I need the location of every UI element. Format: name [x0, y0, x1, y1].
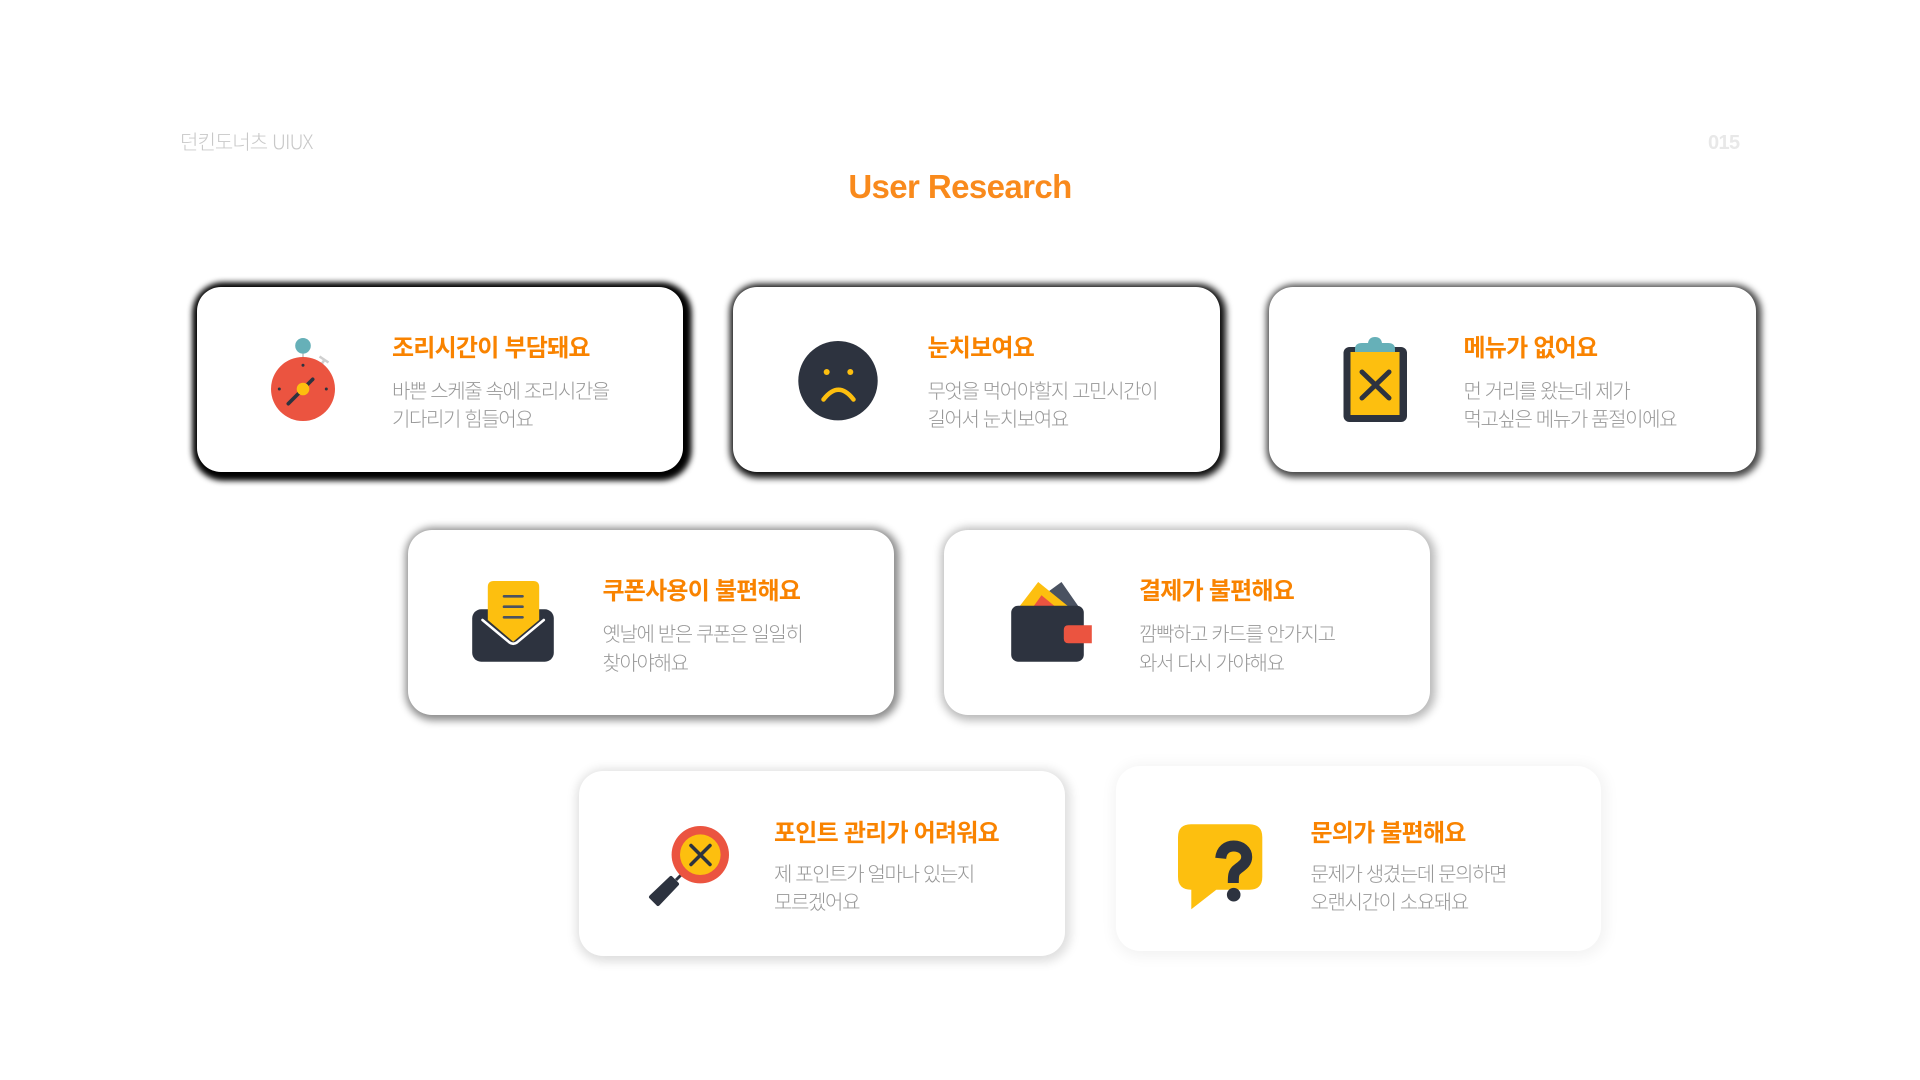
icon: envelope with coupon [472, 581, 554, 662]
page number: 015 [1708, 132, 1740, 154]
heading: 포인트 관리가 어려워요 [774, 812, 999, 848]
icon: clipboard [1344, 337, 1407, 422]
text: 제 포인트가 얼마나 있는지 [774, 858, 974, 887]
text [774, 858, 974, 915]
text: 문제가 생겼는데 문의하면 [1310, 858, 1506, 886]
text: 길어서 눈치보여요 [928, 403, 1068, 432]
text: 무엇을 먹어야할지 고민시간이 [928, 375, 1157, 404]
heading: 눈치보여요 [928, 328, 1034, 363]
icon: magnifier [648, 826, 729, 906]
heading: 결제가 불편해요 [1139, 571, 1294, 606]
icon: question bubble [1178, 824, 1262, 910]
heading: 조리시간이 부담돼요 [392, 328, 590, 363]
icon: sad face [798, 341, 878, 420]
panel: payment [944, 530, 1430, 715]
text: 바쁜 스케줄 속에 조리시간을 [392, 375, 609, 404]
text: 깜빡하고 카드를 안가지고 [1139, 618, 1335, 647]
text: 먹고싶은 메뉴가 품절이에요 [1464, 403, 1676, 432]
heading: 문의가 불편해요 [1310, 812, 1466, 848]
panel: feeling pressured [732, 287, 1220, 472]
text: 먼 거리를 왔는데 제가 [1464, 375, 1629, 404]
text: 오랜시간이 소요돼요 [1310, 886, 1468, 914]
text [1139, 618, 1335, 676]
text [1464, 375, 1676, 432]
heading: 메뉴가 없어요 [1464, 328, 1597, 363]
text [1310, 858, 1506, 914]
text: 기다리기 힘들어요 [392, 403, 532, 432]
text: 모르겠어요 [774, 886, 859, 915]
text [392, 375, 610, 432]
text [602, 618, 802, 676]
text [928, 375, 1157, 432]
icon: wallet [1011, 582, 1092, 662]
title: User Research [848, 168, 1072, 205]
panel: inquiry [1116, 766, 1600, 950]
panel: points [579, 771, 1065, 956]
heading: 쿠폰사용이 불편해요 [602, 571, 800, 606]
header label: 던킨도너츠 UIUX [180, 126, 312, 155]
text: 옛날에 받은 쿠폰은 일일히 [602, 618, 802, 647]
panel: no menu [1268, 287, 1756, 472]
panel: coupon [408, 530, 894, 715]
text: 와서 다시 가야해요 [1139, 647, 1284, 676]
icon: stopwatch [271, 338, 335, 421]
panel: cooking time [197, 287, 683, 472]
text: 찾아야해요 [602, 647, 688, 676]
